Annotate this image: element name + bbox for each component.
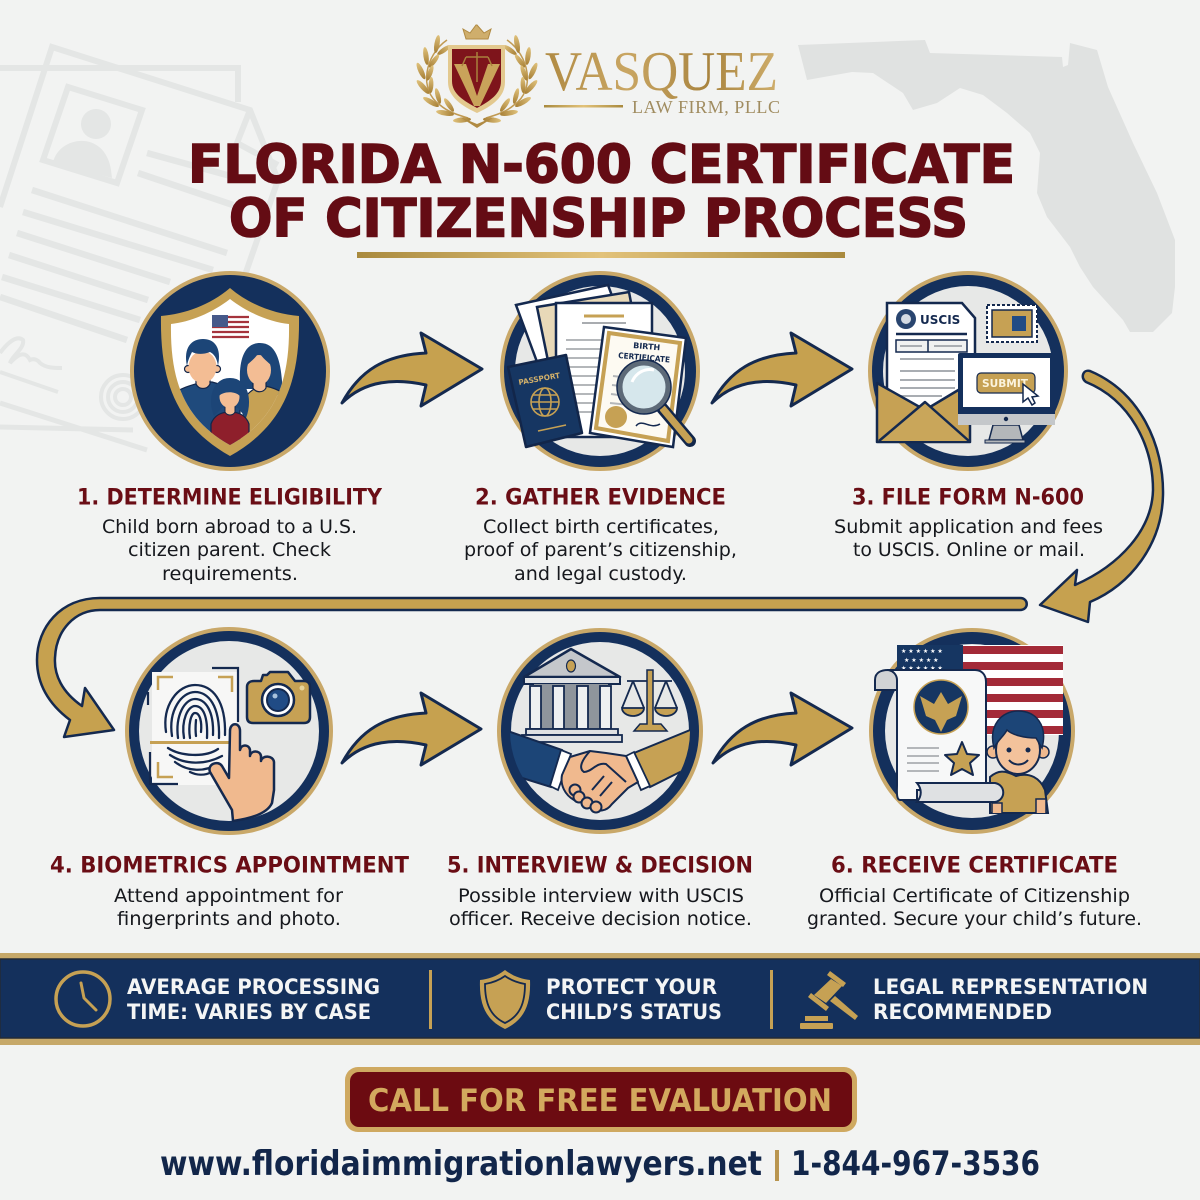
firm name: VASQUEZ (545, 41, 778, 103)
step description: officer. Receive decision notice. (449, 908, 752, 930)
step heading: 3. FILE FORM N-600 (852, 484, 1084, 510)
step heading: 4. BIOMETRICS APPOINTMENT (50, 852, 410, 878)
contact line: 1-844-967-3536 (791, 1144, 1040, 1184)
step description: Child born abroad to a U.S. (102, 516, 357, 538)
icon: certificate scroll, flag and smiling child: ★ ★ ★ ★ ★ ★ (901, 665, 943, 672)
arrow: long connector from row one to step 4 (37, 598, 1027, 737)
icon: crown (463, 25, 491, 39)
step description: to USCIS. Online or mail. (853, 539, 1085, 561)
title: OF CITIZENSHIP PROCESS (229, 188, 968, 250)
icon: fingerprint scan, camera and hand (125, 627, 333, 835)
info banner (0, 953, 1200, 1045)
step heading: 6. RECEIVE CERTIFICATE (831, 852, 1118, 878)
banner text: processing time: TIME: VARIES BY CASE (127, 1000, 371, 1025)
icon: documents, passport, certificate and magnifier: BIRTH (633, 341, 661, 352)
step 1: determine eligibility (77, 271, 383, 585)
step heading: 1. DETERMINE ELIGIBILITY (77, 484, 383, 510)
step description (449, 885, 752, 930)
left branch (415, 35, 471, 123)
title: FLORIDA N-600 CERTIFICATE (188, 134, 1015, 196)
icon: red shield with V (448, 45, 505, 113)
icon: laurel wreath (415, 35, 539, 128)
banner text: protect status: CHILD’S STATUS (546, 1000, 722, 1025)
icon: USCIS form, envelope, stamp and computer: USCIS (920, 313, 960, 327)
banner text: processing time (127, 975, 380, 1025)
banner text: protect status (546, 975, 722, 1025)
background watermark: document with photo, fingerprint and signature (0, 47, 278, 450)
icon: documents, passport, certificate and magnifier (500, 271, 700, 471)
icon: documents, passport, certificate and magnifier: PASSPORT (518, 371, 562, 387)
step description: citizen parent. Check (128, 539, 331, 561)
right branch (483, 35, 539, 123)
arrow: step 4 to 5 (342, 693, 481, 765)
decorative logo rule (544, 105, 623, 108)
step description: and legal custody. (514, 563, 687, 585)
step 5: interview and decision (447, 628, 753, 930)
step description: proof of parent’s citizenship, (464, 539, 737, 561)
step heading: 2. GATHER EVIDENCE (475, 484, 726, 510)
icon: certificate scroll, flag and smiling child: ★ ★ ★ ★ ★ (904, 657, 939, 664)
firm suffix: LAW FIRM, PLLC (632, 97, 780, 117)
divider (770, 970, 773, 1029)
step 4: biometrics appointment (50, 627, 410, 930)
icon: family in shield (130, 271, 330, 471)
step description (114, 885, 343, 930)
call to action button (345, 1067, 857, 1132)
logo: Vasquez Law Firm (415, 25, 780, 128)
step description (464, 516, 737, 585)
step description: Collect birth certificates, (483, 516, 719, 538)
title (188, 134, 1015, 250)
step 6: receive certificate (807, 628, 1142, 930)
icon: USCIS form, envelope, stamp and computer: SUBMIT (982, 377, 1028, 390)
banner text: processing time: AVERAGE PROCESSING (127, 975, 380, 1000)
step description (834, 516, 1103, 561)
icon: gavel (800, 971, 858, 1029)
step description (102, 516, 357, 585)
icon: courthouse, scales and handshake (497, 628, 703, 834)
icon: clock (56, 972, 110, 1026)
step heading: 5. INTERVIEW & DECISION (447, 852, 753, 878)
contact line: www.floridaimmigrationlawyers.net (160, 1144, 762, 1184)
title underline (357, 252, 845, 258)
step description: requirements. (162, 563, 298, 585)
icon: shield (480, 970, 530, 1029)
step 2: gather evidence (464, 271, 737, 585)
step description: granted. Secure your child’s future. (807, 908, 1142, 930)
step description (807, 885, 1142, 930)
icon: certificate scroll, flag and smiling child (869, 628, 1075, 834)
icon: USCIS form, envelope, stamp and computer (868, 271, 1068, 471)
background watermark: Florida state silhouette (798, 40, 1175, 332)
arrow: step 2 to 3 (712, 333, 852, 406)
divider (429, 970, 432, 1029)
icon: documents, passport, certificate and magnifier: CERTIFICATE (618, 351, 670, 365)
call to action button: CALL FOR FREE EVALUATION (368, 1083, 832, 1119)
step description: Submit application and fees (834, 516, 1103, 538)
step description: Possible interview with USCIS (458, 885, 744, 907)
banner text: protect status: PROTECT YOUR (546, 975, 717, 1000)
banner text: legal representation (873, 975, 1148, 1025)
step 3: file form N-600 (834, 271, 1103, 561)
banner text: legal representation: LEGAL REPRESENTATION (873, 975, 1148, 1000)
step description: Official Certificate of Citizenship (819, 885, 1130, 907)
arrow: step 3 curving down (1040, 371, 1163, 622)
banner text: legal representation: RECOMMENDED (873, 1000, 1052, 1025)
arrow: step 1 to 2 (342, 333, 482, 406)
icon: certificate scroll, flag and smiling child: ★ ★ ★ ★ ★ ★ (901, 648, 943, 655)
arrow: step 5 to 6 (713, 693, 852, 765)
step description: fingerprints and photo. (117, 908, 341, 930)
step description: Attend appointment for (114, 885, 343, 907)
